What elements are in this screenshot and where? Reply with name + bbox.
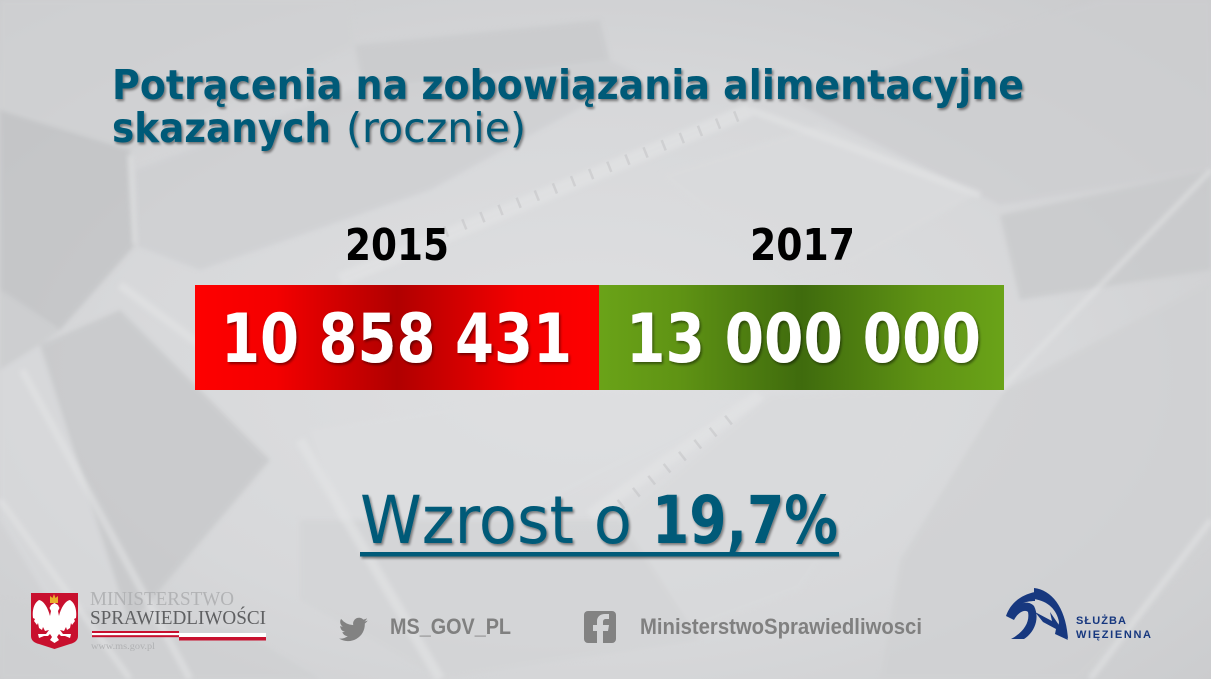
logo: Służba Więzienna: WIĘZIENNA [1076, 629, 1151, 641]
growth headline: 19,7% [652, 482, 838, 559]
logo: Służba Więzienna: SŁUŻBA [1076, 614, 1126, 627]
growth headline: Wzrost o [360, 482, 632, 559]
logo: Ministerstwo Sprawiedliwości [31, 589, 266, 651]
title: (rocznie) [346, 104, 526, 152]
icon: facebook [584, 611, 616, 643]
icon: SW emblem [1006, 588, 1068, 640]
icon: twitter bird [339, 618, 368, 641]
facebook page name: MinisterstwoSprawiedliwosci [640, 614, 922, 639]
title: skazanych [112, 104, 331, 152]
logo: Służba Więzienna [1006, 588, 1151, 641]
year label 2015: 2015 [345, 220, 449, 271]
red value box 2015 [195, 285, 599, 390]
logo: Ministerstwo Sprawiedliwości: MINISTERSTWO [90, 589, 234, 610]
title: Potrącenia na zobowiązania alimentacyjne [112, 61, 1024, 109]
growth headline [360, 482, 839, 559]
icon: Polish eagle shield [31, 593, 78, 649]
green value box 2017: 13 000 000 [626, 300, 981, 379]
flag ribbon [92, 631, 266, 640]
year label 2017: 2017 [750, 220, 855, 271]
green value box 2017 [599, 285, 1004, 390]
red value box 2015: 10 858 431 [221, 300, 572, 379]
logo: Ministerstwo Sprawiedliwości: www.ms.gov.pl [91, 641, 156, 651]
logo: Ministerstwo Sprawiedliwości: SPRAWIEDLIWOŚCI [90, 607, 266, 629]
title [112, 61, 1024, 152]
twitter handle: MS_GOV_PL [390, 614, 511, 639]
